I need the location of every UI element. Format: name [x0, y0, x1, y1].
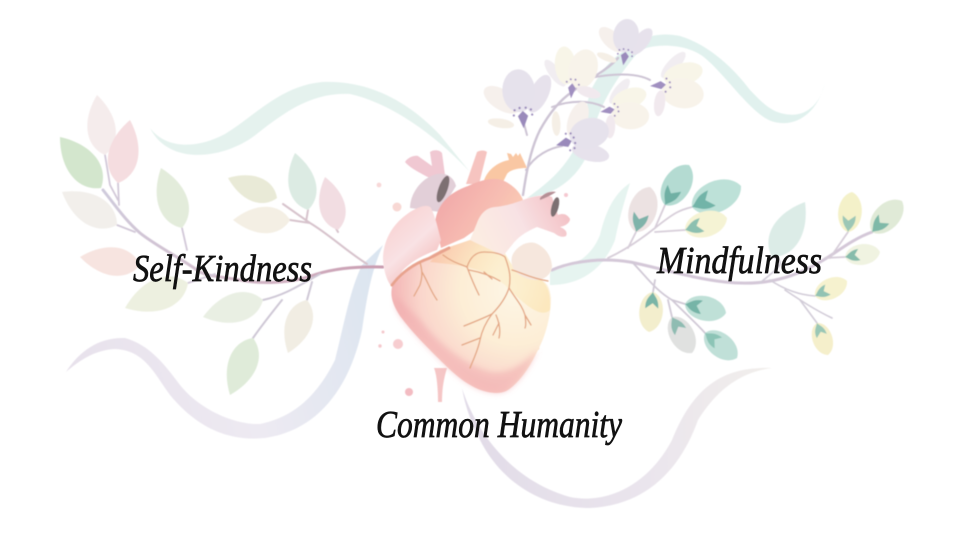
leaves [48, 93, 350, 400]
ribbon: bottom lilac [462, 368, 772, 508]
anatomical heart [377, 150, 570, 402]
blossom 4 [647, 46, 708, 118]
pulmonary artery [470, 196, 570, 256]
ventricle warm wash [430, 240, 550, 313]
blossom 6 [545, 92, 618, 177]
aorta tube [466, 150, 487, 184]
ribbon: top left teal [150, 82, 470, 172]
superior vessels, back [405, 150, 445, 180]
aortic arch [483, 153, 527, 184]
pulmonary trunk [435, 179, 523, 248]
drip and splatter [377, 183, 568, 402]
right atrium [383, 206, 441, 287]
ribbon: left lilac to blue [66, 245, 383, 439]
label: Mindfulness: Mindfulness [656, 240, 822, 282]
buds and leaves [623, 158, 911, 367]
blossom 5 [595, 72, 655, 140]
ribbon: top right teal [527, 35, 825, 198]
watercolor ribbons [66, 35, 825, 508]
right branch: mindfulness [552, 158, 911, 367]
label: Self-Kindness: Self-Kindness [133, 248, 312, 290]
label: Common Humanity: Common Humanity [376, 404, 622, 446]
ventricle lower rose edge [395, 295, 538, 393]
blossom 3 [590, 14, 658, 71]
blossom stems [523, 58, 650, 195]
blossom 1 [478, 67, 559, 132]
blossom 2 [538, 43, 606, 101]
ribbon: small teal right of heart [550, 183, 630, 285]
left atrial appendage [512, 242, 552, 280]
grey vessel opening [434, 174, 452, 204]
branch stems [103, 155, 383, 360]
ventricles [391, 240, 551, 393]
top branch with blossoms [478, 14, 708, 195]
left branch: self-kindness [48, 93, 383, 400]
coronary vessels [392, 248, 548, 368]
second grey vessel opening [549, 196, 561, 218]
branch stems [552, 205, 872, 333]
